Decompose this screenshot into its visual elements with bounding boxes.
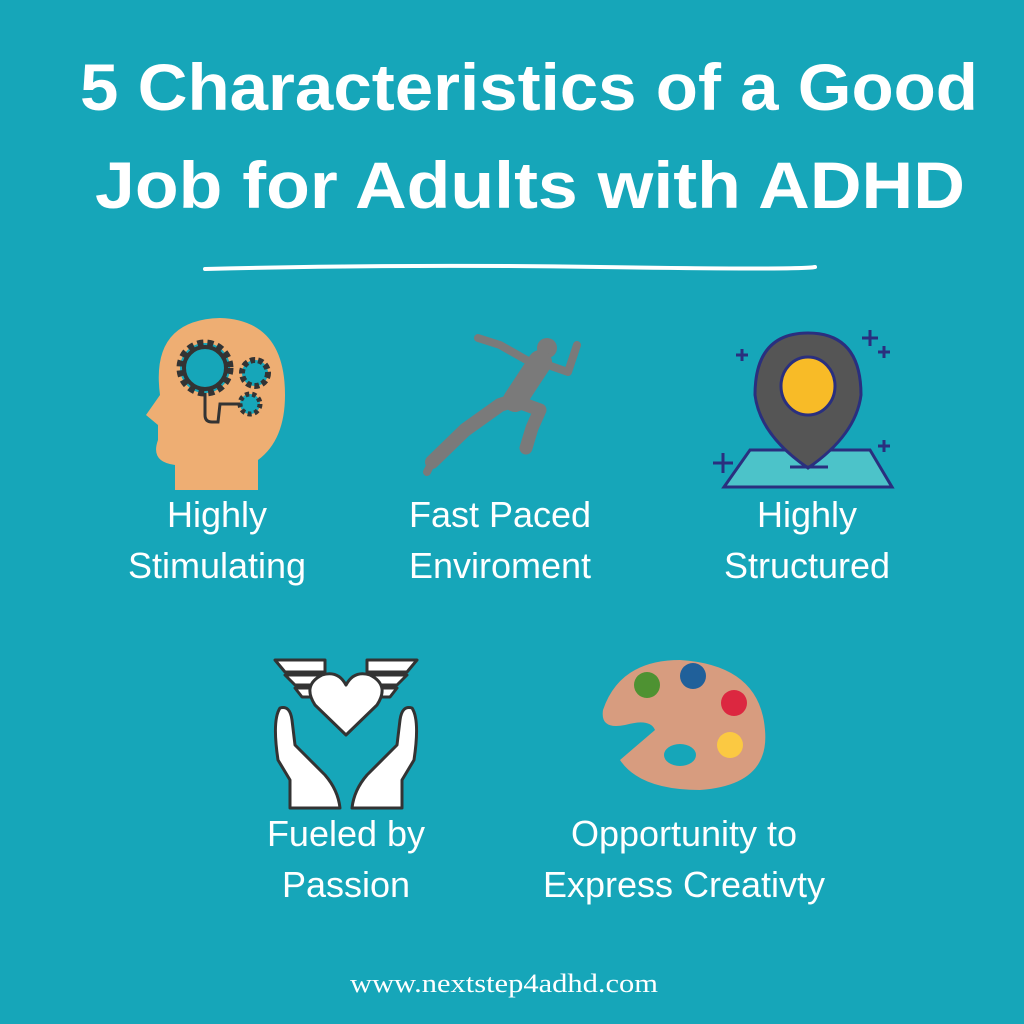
labels: Stimulating [128, 545, 306, 586]
labels: Fast Paced [409, 494, 591, 535]
icon: heart with wings and hands [275, 660, 417, 808]
labels: Highly [167, 494, 267, 535]
title underline [205, 266, 815, 269]
icon: location pin [713, 330, 892, 487]
labels [128, 494, 890, 905]
footer url: www.nextstep4adhd.com [350, 969, 658, 998]
labels: Opportunity to [571, 813, 797, 854]
title [80, 50, 978, 222]
icon: paint palette [603, 660, 765, 790]
labels: Enviroment [409, 545, 591, 586]
title: 5 Characteristics of a Good [80, 50, 978, 124]
icon: runner [427, 338, 577, 472]
title: Job for Adults with ADHD [95, 148, 965, 222]
labels: Highly [757, 494, 857, 535]
icon: head with gears [146, 318, 285, 490]
labels: Fueled by [267, 813, 425, 854]
labels: Passion [282, 864, 410, 905]
labels: Structured [724, 545, 890, 586]
labels: Express Creativty [543, 864, 825, 905]
